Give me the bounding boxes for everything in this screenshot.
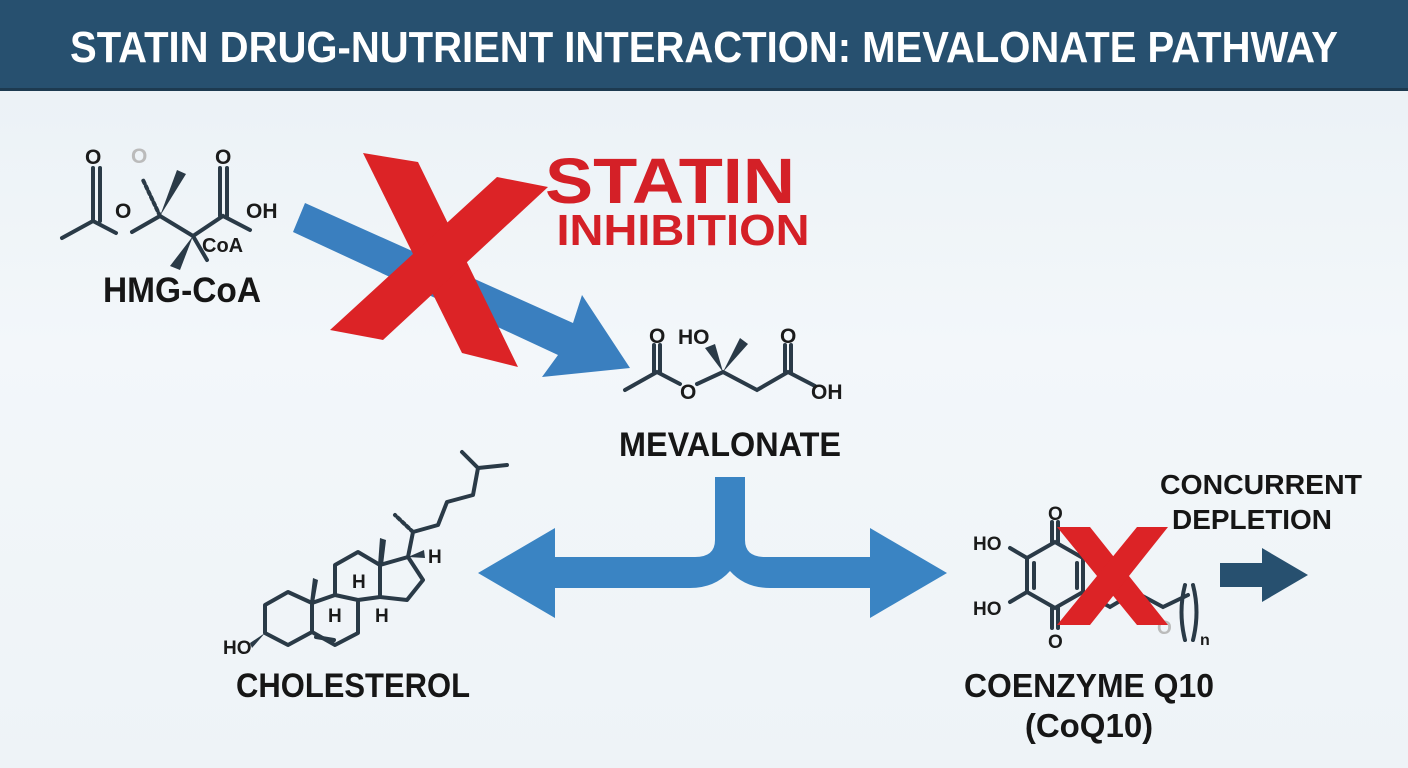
arrow: HMG-CoA to mevalonate — [293, 203, 630, 377]
icon: red X over CoQ10 — [1057, 527, 1168, 625]
label: coenzyme Q10 — [964, 667, 1214, 744]
molecule: HMG-CoA: OH — [246, 200, 278, 223]
label: HMG-CoA: HMG-CoA — [103, 271, 261, 310]
molecule: HMG-CoA: O — [131, 145, 147, 168]
molecule: mevalonate — [625, 325, 842, 404]
molecule: mevalonate: O — [680, 381, 696, 404]
molecule: cholesterol: H — [328, 606, 342, 627]
header bar — [0, 0, 1408, 91]
molecule: HMG-CoA — [62, 145, 278, 270]
molecule: cholesterol: H — [352, 572, 366, 593]
label: mevalonate: MEVALONATE — [619, 426, 841, 464]
label: concurrent depletion: DEPLETION — [1172, 504, 1332, 535]
molecule: HMG-CoA: O — [85, 146, 101, 169]
label: statin inhibition: INHIBITION — [556, 206, 810, 255]
molecule: mevalonate: O — [780, 325, 796, 348]
molecule: cholesterol — [223, 452, 507, 659]
molecule: cholesterol: H — [375, 606, 389, 627]
molecule: coenzyme Q10: O — [1157, 618, 1172, 639]
arrow: branching to cholesterol and CoQ10 — [478, 477, 947, 618]
molecule: HMG-CoA: O — [215, 146, 231, 169]
label: statin inhibition — [545, 145, 810, 255]
molecule: HMG-CoA: CoA — [202, 235, 243, 257]
arrow: depletion — [1220, 548, 1308, 602]
label: concurrent depletion — [1160, 469, 1362, 535]
molecule: coenzyme Q10: HO — [973, 599, 1002, 620]
molecule: mevalonate: OH — [811, 381, 842, 404]
molecule: mevalonate: O — [649, 325, 665, 348]
label: cholesterol: CHOLESTEROL — [236, 667, 470, 705]
molecule: coenzyme Q10: n — [1200, 632, 1210, 649]
molecule: coenzyme Q10: HO — [973, 534, 1002, 555]
molecule: HMG-CoA: O — [115, 200, 131, 223]
molecule: coenzyme Q10 — [973, 504, 1210, 653]
icon: red X (statin inhibition) — [330, 153, 548, 367]
label: concurrent depletion: CONCURRENT — [1160, 469, 1362, 500]
label: coenzyme Q10: COENZYME Q10 — [964, 667, 1214, 704]
molecule: mevalonate: HO — [678, 326, 710, 349]
label: coenzyme Q10: (CoQ10) — [1025, 707, 1153, 744]
molecule: coenzyme Q10: O — [1048, 632, 1063, 653]
label: statin inhibition: STATIN — [545, 145, 795, 217]
molecule: coenzyme Q10: O — [1048, 504, 1063, 525]
molecule: cholesterol: H — [428, 547, 442, 568]
molecule: cholesterol: HO — [223, 638, 252, 659]
